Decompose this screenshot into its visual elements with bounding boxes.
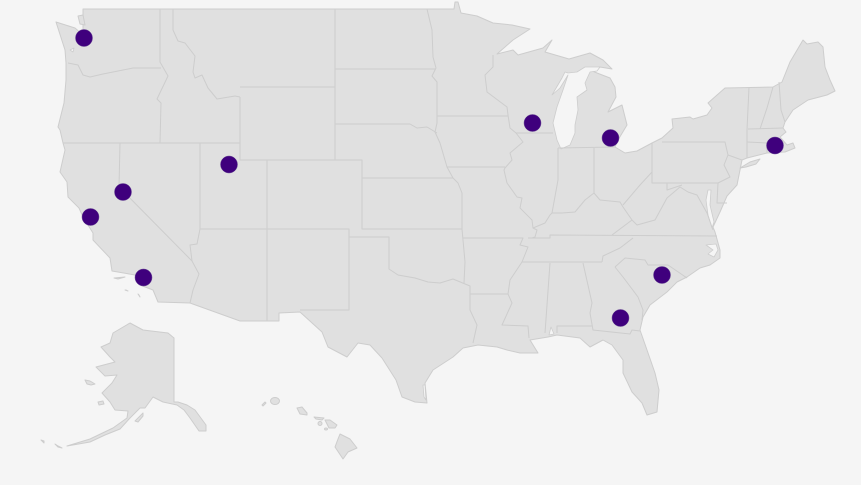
Long Island bbox=[740, 159, 760, 168]
Mobile Bay bbox=[549, 327, 554, 335]
marker: South Carolina bbox=[654, 266, 670, 284]
state borders bbox=[63, 9, 785, 343]
Chesapeake Bay bbox=[706, 190, 714, 228]
Pamlico Sound bbox=[706, 244, 718, 257]
Channel Islands bbox=[114, 277, 140, 297]
marker: Nevada border bbox=[114, 184, 132, 200]
Lake Michigan bbox=[552, 67, 600, 149]
marker: Seattle area bbox=[76, 30, 92, 46]
contiguous United States bbox=[56, 2, 835, 415]
marker: Bay Area bbox=[82, 208, 99, 226]
Hawaii bbox=[262, 398, 357, 459]
marker: Michigan bbox=[602, 130, 619, 146]
marker: Wisconsin bbox=[524, 114, 541, 132]
Puget Sound islands bbox=[78, 15, 85, 25]
Laguna Madre bbox=[423, 385, 426, 400]
marker: Georgia bbox=[612, 310, 629, 326]
marker: Utah bbox=[220, 156, 238, 173]
marker: Massachusetts bbox=[766, 137, 784, 154]
marker: Los Angeles area bbox=[135, 269, 152, 286]
Alaska bbox=[41, 323, 206, 448]
Puget Sound bbox=[70, 48, 74, 52]
